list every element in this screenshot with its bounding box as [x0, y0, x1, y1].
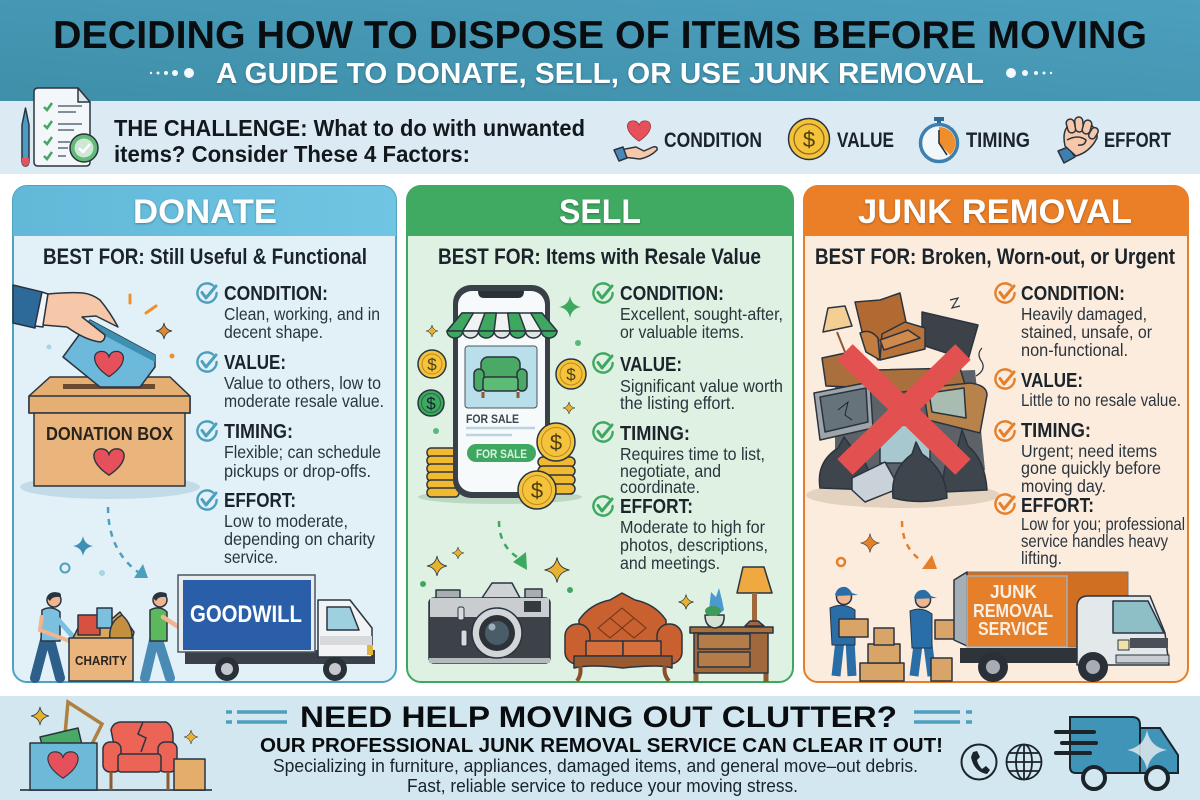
title: DECIDING HOW TO DISPOSE OF ITEMS BEFORE MOVING: [53, 14, 1147, 57]
donate factors: depending on charity: [224, 529, 375, 549]
illustration: goodwill truck: [178, 575, 375, 681]
junk factors: TIMING:: [1021, 420, 1091, 442]
sell factors: TIMING:: [620, 423, 690, 445]
illustration: phone storefront: FOR SALE: [476, 447, 527, 461]
panel: sell: [407, 186, 793, 682]
left coin stack: [427, 448, 459, 497]
footer left illustration: [20, 702, 212, 790]
junk factors: Heavily damaged,: [1021, 304, 1147, 324]
coins: $: [531, 478, 543, 503]
donate factors: decent shape.: [224, 322, 323, 342]
header band: [0, 0, 1200, 101]
illustration: junk removal truck: JUNK: [990, 582, 1037, 602]
factor: value: [788, 118, 894, 160]
illustration: camera: [429, 583, 550, 663]
illustration: donation box: [13, 285, 200, 499]
challenge band: [0, 88, 1200, 174]
footer subheading: OUR PROFESSIONAL JUNK REMOVAL SERVICE CAN CLEAR IT OUT!: [260, 735, 943, 757]
footer band: [0, 696, 1200, 800]
illustration: goodwill truck: GOODWILL: [190, 601, 302, 628]
junk factors: stained, unsafe, or: [1021, 322, 1152, 342]
coins: $: [427, 355, 437, 374]
junk factors: [995, 283, 1185, 568]
illustration: side table with lamp and plant: [678, 567, 773, 682]
panel: donate: [13, 186, 396, 682]
arrow: donate dashed: [60, 507, 148, 578]
factor: effort: EFFORT: [1104, 129, 1171, 152]
donate factors: [197, 283, 384, 567]
sell header: [407, 186, 793, 236]
donate factors: moderate resale value.: [224, 391, 384, 411]
factor: value: VALUE: [837, 129, 894, 152]
donate best for: BEST FOR: Still Useful & Functional: [43, 244, 367, 269]
donate factors: VALUE:: [224, 352, 286, 374]
challenge text: [114, 115, 585, 167]
heading rules: [226, 712, 972, 722]
sell factors: CONDITION:: [620, 283, 724, 305]
donate header: DONATE: [133, 193, 277, 231]
sell factors: Excellent, sought-after,: [620, 304, 783, 324]
factor: timing: [920, 117, 1030, 162]
sell factors: negotiate, and: [620, 461, 721, 481]
illustration: phone storefront: [418, 285, 586, 509]
donation card and hand: [13, 285, 155, 387]
illustration: workers and boxes: [830, 587, 955, 681]
donate factors: TIMING:: [224, 421, 293, 443]
decorative dots right: [1006, 68, 1052, 78]
footer body line 1: Specializing in furniture, appliances, damaged items, and general move–out debris.: [273, 755, 918, 776]
right coin stack: [538, 457, 575, 494]
junk factors: lifting.: [1021, 548, 1062, 568]
junk header: [804, 186, 1188, 236]
donate factors: Value to others, low to: [224, 373, 381, 393]
coins: [418, 350, 586, 509]
green armchair: [474, 357, 527, 398]
junk factors: service handles heavy: [1021, 531, 1168, 551]
junk factors: Urgent; need items: [1021, 441, 1157, 461]
sell factors: and meetings.: [620, 553, 720, 573]
arrow: junk dashed: [837, 521, 937, 569]
factor: timing: TIMING: [966, 129, 1030, 152]
icon: checklist: [22, 88, 98, 166]
sell header: SELL: [559, 193, 641, 231]
illustration: junk pile with red X: [806, 293, 1000, 508]
footer body line 2: Fast, reliable service to reduce your moving stress.: [407, 775, 798, 796]
factor: effort: [1058, 117, 1171, 163]
junk factors: EFFORT:: [1021, 495, 1094, 517]
factor: condition: [614, 121, 762, 161]
challenge text: THE CHALLENGE: What to do with unwanted: [114, 115, 585, 141]
donate factors: Low to moderate,: [224, 511, 348, 531]
coins: $: [550, 430, 562, 455]
footer heading: NEED HELP MOVING OUT CLUTTER?: [300, 701, 897, 734]
illustration: donation box: DONATION BOX: [46, 424, 173, 444]
sell factors: EFFORT:: [620, 496, 693, 518]
donate header: [13, 186, 396, 236]
factor: value: $: [803, 127, 815, 152]
donate factors: pickups or drop-offs.: [224, 461, 371, 481]
illustration: junk removal truck: [954, 572, 1169, 682]
sell best for: BEST FOR: Items with Resale Value: [438, 244, 761, 269]
illustration: workers with charity box: CHARITY: [75, 653, 127, 668]
illustration: junk removal truck: SERVICE: [978, 619, 1048, 639]
junk factors: moving day.: [1021, 476, 1106, 496]
sell factors: Significant value worth: [620, 376, 783, 396]
sell factors: or valuable items.: [620, 322, 744, 342]
arrow: sell dashed: [420, 521, 573, 593]
sell factors: [593, 283, 783, 573]
sell factors: the listing effort.: [620, 393, 735, 413]
coins: $: [566, 365, 576, 384]
donate factors: Flexible; can schedule: [224, 442, 381, 462]
subtitle: A GUIDE TO DONATE, SELL, OR USE JUNK REMOVAL: [216, 58, 984, 90]
panel: junk removal: [804, 186, 1188, 682]
sell factors: Requires time to list,: [620, 444, 765, 464]
junk factors: gone quickly before: [1021, 458, 1161, 478]
illustration: phone storefront: FOR SALE: [466, 412, 519, 426]
junk factors: CONDITION:: [1021, 283, 1125, 305]
icon: delivery truck: [1056, 717, 1178, 789]
donate factors: EFFORT:: [224, 490, 296, 512]
donate factors: service.: [224, 547, 278, 567]
illustration: junk removal truck: REMOVAL: [973, 601, 1053, 621]
icon: phone: [962, 744, 996, 780]
junk header: JUNK REMOVAL: [858, 193, 1132, 231]
donate factors: CONDITION:: [224, 283, 328, 305]
coins: $: [426, 394, 436, 413]
decorative dots left: [150, 68, 194, 78]
challenge text: items? Consider These 4 Factors:: [114, 141, 470, 167]
factor: condition: CONDITION: [664, 129, 762, 152]
icon: globe: [1006, 744, 1042, 780]
sell factors: photos, descriptions,: [620, 535, 768, 555]
junk factors: VALUE:: [1021, 370, 1083, 392]
illustration: orange sofa: [565, 593, 682, 681]
awning: [447, 313, 557, 338]
illustration: workers with charity box: [35, 592, 180, 681]
brown armchair: [855, 293, 925, 360]
sell factors: coordinate.: [620, 477, 700, 497]
sell factors: Moderate to high for: [620, 517, 765, 537]
donate factors: Clean, working, and in: [224, 304, 380, 324]
red X mark: [845, 352, 963, 467]
sell factors: VALUE:: [620, 354, 682, 376]
junk factors: non-functional.: [1021, 340, 1128, 360]
